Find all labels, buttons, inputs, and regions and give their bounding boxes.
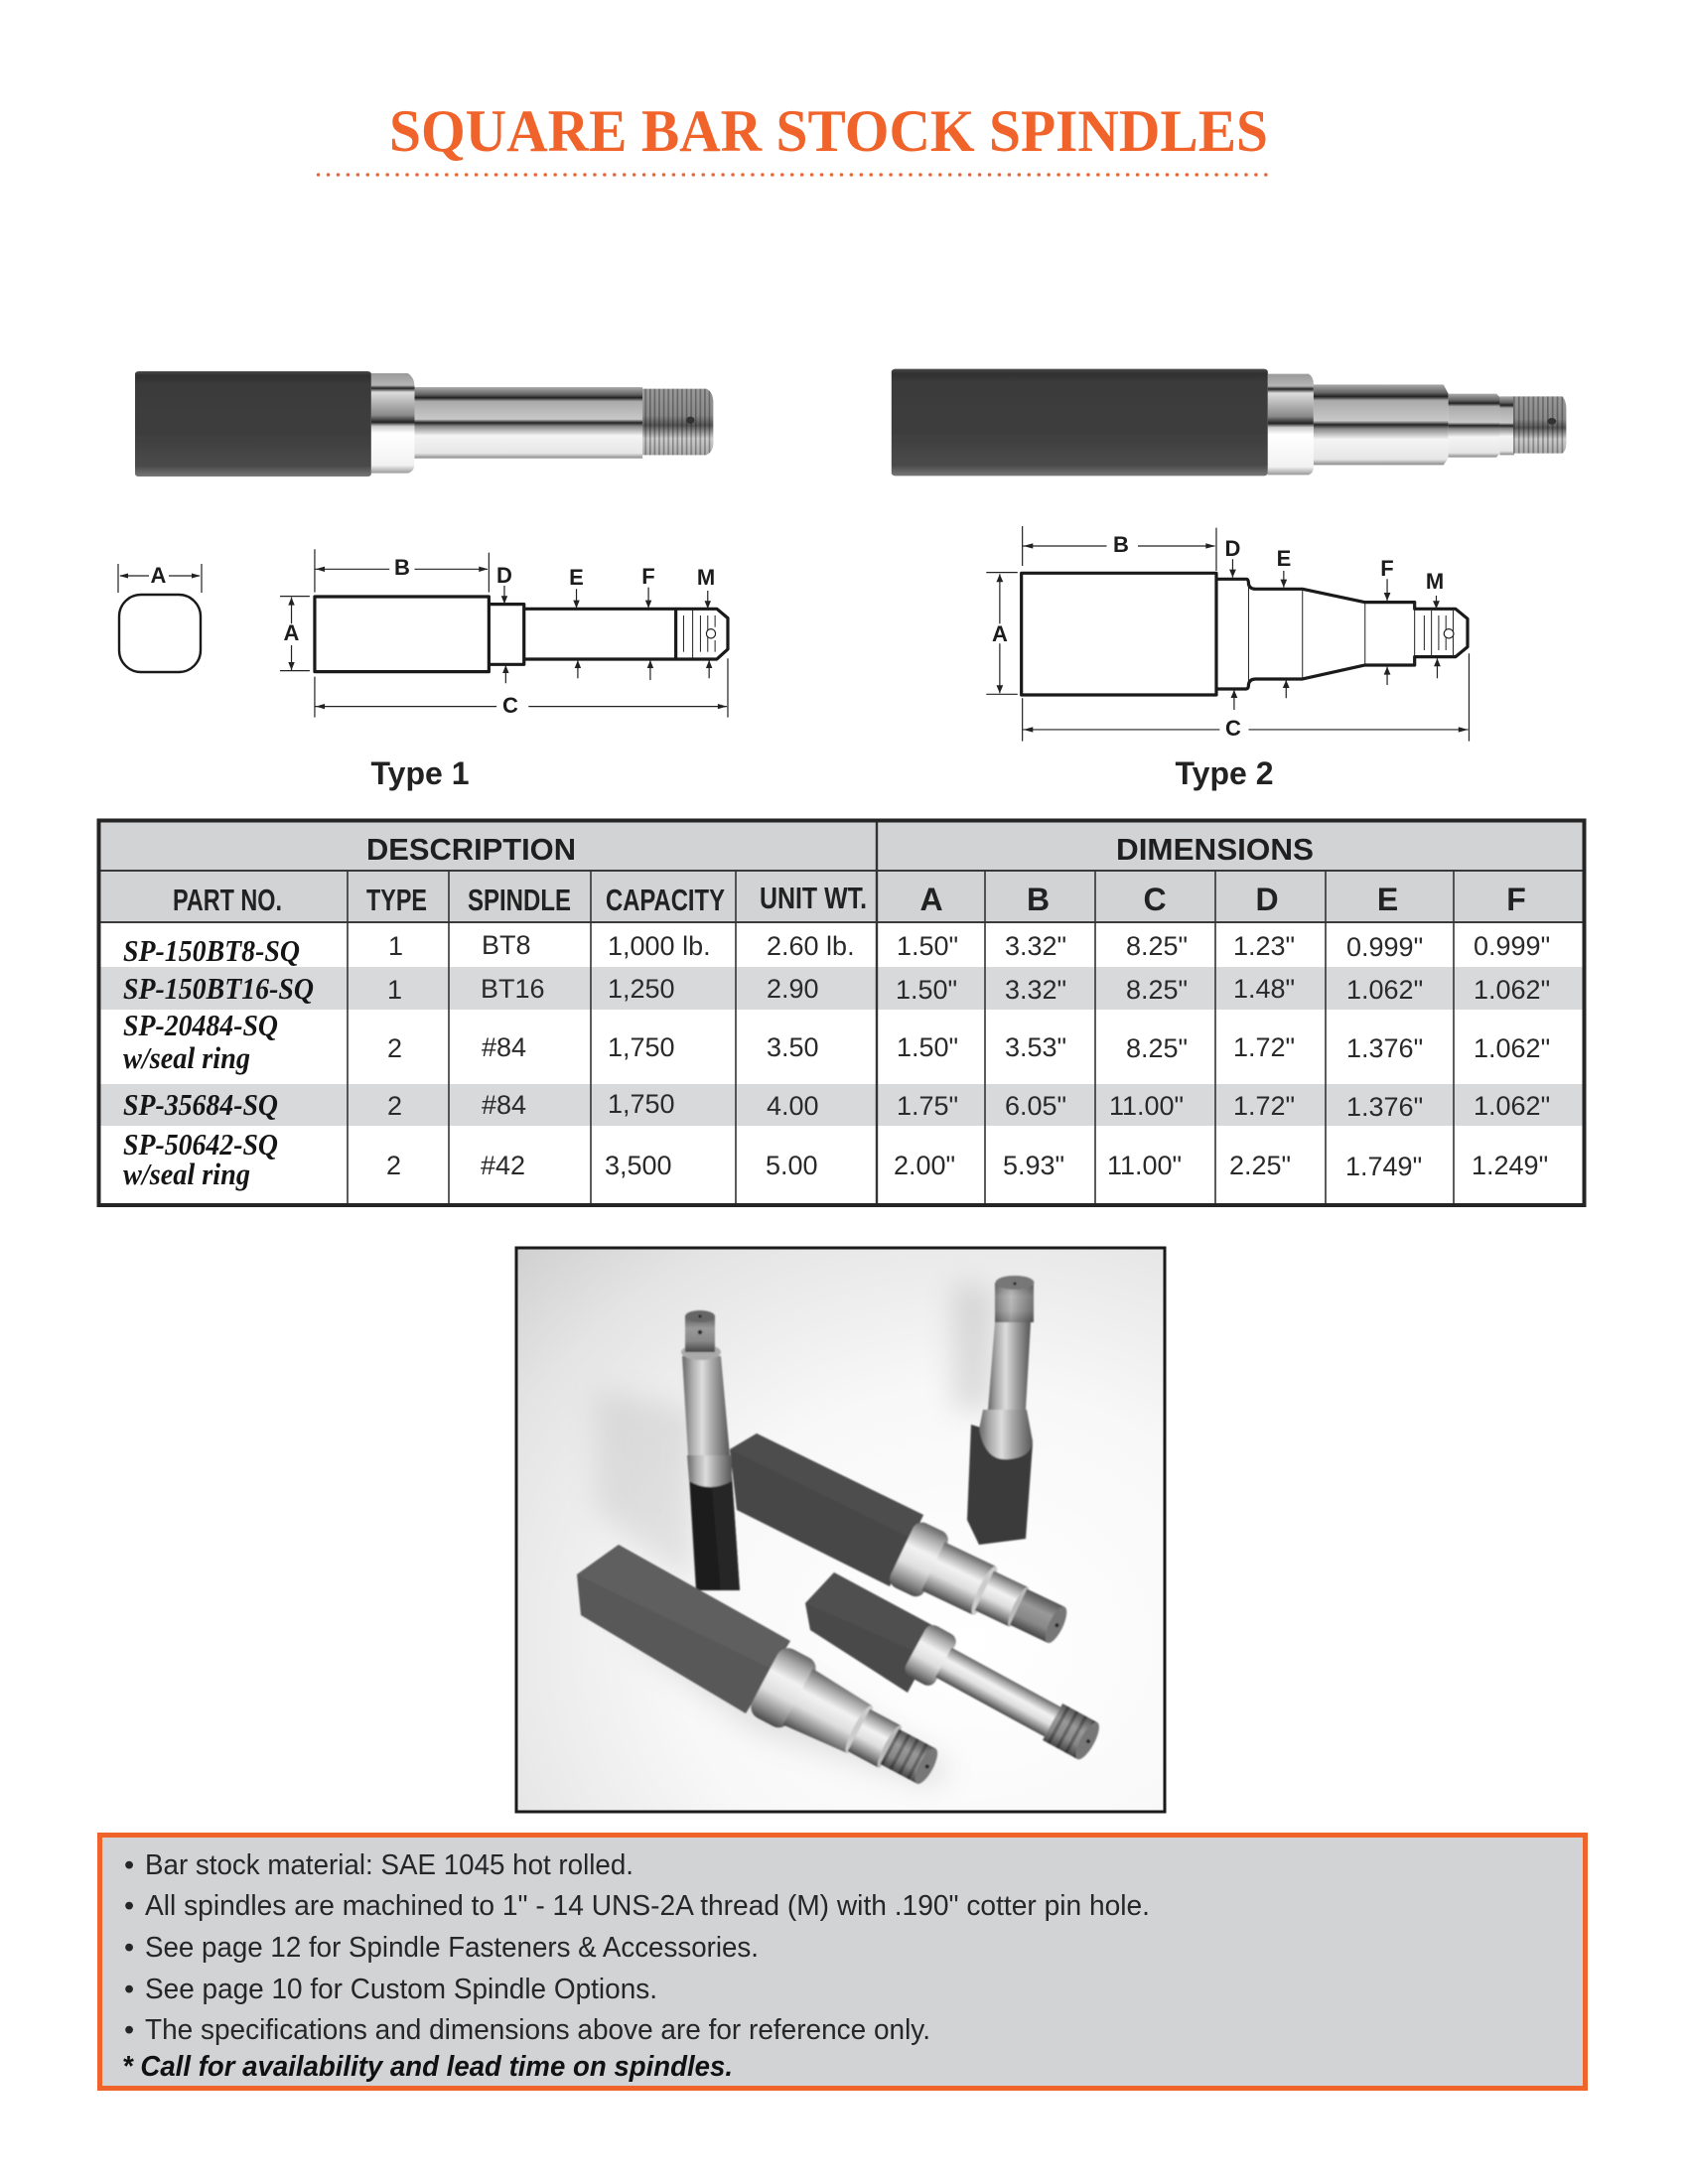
row: SP-35684-SQ: 1,750 xyxy=(608,1089,675,1119)
row: SP-150BT8-SQ: 0.999" xyxy=(1346,932,1423,962)
row: SP-150BT16-SQ: 1.50" xyxy=(896,975,957,1005)
row: SP-150BT8-SQ xyxy=(123,930,1550,968)
table column headers: A xyxy=(919,882,943,917)
diagram: type 2: M xyxy=(1426,569,1444,594)
table column headers: B xyxy=(1027,882,1050,917)
note: availability: * Call for availability and lead time on spindles. xyxy=(122,2051,733,2083)
row: SP-150BT16-SQ: 1.48" xyxy=(1233,974,1295,1004)
note: thread: • xyxy=(124,1890,134,1922)
diagram: type 2: C xyxy=(1225,716,1241,741)
row: SP-20484-SQ: #84 xyxy=(482,1032,526,1062)
row: SP-35684-SQ: 1.376" xyxy=(1346,1092,1423,1122)
title: SQUARE BAR STOCK SPINDLES xyxy=(389,98,1268,164)
spindle: lying front small xyxy=(805,1572,1107,1769)
row: SP-35684-SQ: SP-35684-SQ xyxy=(123,1087,278,1122)
photo: type 2 spindle xyxy=(892,369,1566,476)
row: SP-150BT8-SQ: BT8 xyxy=(482,930,531,960)
note: thread: All spindles are machined to 1" - 14 UNS-2A thread (M) with .190" cotter pin hole. xyxy=(145,1890,1150,1922)
table column headers: SPINDLE xyxy=(468,883,571,917)
caption: type 1: Type 1 xyxy=(371,755,469,791)
row: SP-150BT8-SQ: 8.25" xyxy=(1126,931,1188,961)
photo: type 1 spindle xyxy=(135,371,713,477)
table: spindle specifications xyxy=(99,820,1585,1205)
diagram: type 2: A xyxy=(992,621,1008,646)
table section headers xyxy=(366,832,1314,867)
row: SP-150BT16-SQ: BT16 xyxy=(481,974,545,1004)
table column headers: C xyxy=(1143,882,1167,917)
table column headers: E xyxy=(1377,882,1398,917)
row: SP-150BT16-SQ xyxy=(123,971,1550,1006)
table section headers: DIMENSIONS xyxy=(1116,832,1314,867)
row: SP-50642-SQ: w/seal ring xyxy=(123,1157,250,1191)
spindle: lying middle xyxy=(730,1433,1077,1660)
row: SP-20484-SQ: SP-20484-SQ xyxy=(123,1008,278,1042)
diagram: square end view: A xyxy=(151,563,167,588)
diagram: type 1: A xyxy=(284,620,300,645)
diagram: type 2: B xyxy=(1113,532,1129,557)
row: SP-150BT8-SQ: 1,000 lb. xyxy=(608,931,711,961)
row: SP-20484-SQ: w/seal ring xyxy=(123,1040,250,1075)
row: SP-20484-SQ: 8.25" xyxy=(1126,1033,1188,1063)
row: SP-50642-SQ: 2.25" xyxy=(1229,1151,1291,1180)
spindle: lying front left xyxy=(577,1545,951,1802)
row: SP-150BT16-SQ: 8.25" xyxy=(1126,975,1188,1005)
table column headers: CAPACITY xyxy=(606,883,725,917)
note: reference only: • xyxy=(124,2014,134,2046)
row: SP-20484-SQ xyxy=(123,1008,1550,1075)
row: SP-35684-SQ: 6.05" xyxy=(1005,1091,1066,1121)
row: SP-150BT8-SQ: 1.50" xyxy=(897,931,958,961)
row: SP-20484-SQ: 1.72" xyxy=(1233,1032,1295,1062)
diagram: type 1: D xyxy=(496,563,512,588)
row: SP-20484-SQ: 3.53" xyxy=(1005,1032,1066,1062)
row: SP-20484-SQ: 2 xyxy=(387,1033,402,1063)
row: SP-150BT16-SQ: SP-150BT16-SQ xyxy=(123,971,314,1006)
diagram: square end view xyxy=(118,563,202,672)
table column headers xyxy=(173,881,1526,917)
note: reference only: The specifications and dimensions above are for reference only. xyxy=(145,2014,930,2046)
table column headers: D xyxy=(1255,882,1279,917)
diagram: type 1: B xyxy=(394,555,410,580)
row: SP-150BT8-SQ: SP-150BT8-SQ xyxy=(123,933,300,968)
note: fasteners: • xyxy=(124,1932,134,1964)
row: SP-35684-SQ xyxy=(123,1087,1550,1122)
row: SP-20484-SQ: 1.50" xyxy=(897,1032,958,1062)
table column headers: UNIT WT. xyxy=(760,881,867,915)
table column headers: TYPE xyxy=(366,883,427,917)
row: SP-150BT16-SQ: 2.90 xyxy=(767,974,819,1004)
diagram: type 1 xyxy=(280,549,728,718)
diagram: type 1: F xyxy=(641,564,655,589)
row: SP-50642-SQ: 11.00" xyxy=(1107,1151,1182,1180)
note: bar stock material: • xyxy=(124,1849,134,1881)
photo: group of five spindles xyxy=(516,1248,1165,1812)
diagram: type 2: E xyxy=(1277,546,1291,571)
row: SP-150BT8-SQ: 1.23" xyxy=(1233,931,1295,961)
row: SP-35684-SQ: #84 xyxy=(482,1090,526,1120)
row: SP-50642-SQ: SP-50642-SQ xyxy=(123,1127,278,1161)
row: SP-50642-SQ: #42 xyxy=(481,1151,525,1180)
row: SP-150BT8-SQ: 2.60 lb. xyxy=(767,931,855,961)
table column headers: PART NO. xyxy=(173,883,282,917)
row: SP-35684-SQ: 1.72" xyxy=(1233,1091,1295,1121)
row: SP-150BT16-SQ: 1,250 xyxy=(608,974,675,1004)
row: SP-35684-SQ: 1.75" xyxy=(897,1091,958,1121)
diagram: type 2 xyxy=(986,526,1469,742)
diagram: type 2: F xyxy=(1380,556,1394,581)
caption: type 2: Type 2 xyxy=(1176,755,1273,791)
row: SP-20484-SQ: 1.376" xyxy=(1346,1033,1423,1063)
row: SP-50642-SQ xyxy=(123,1127,1548,1191)
diagram: type 1: E xyxy=(569,565,584,590)
row: SP-150BT16-SQ: 1 xyxy=(387,975,402,1005)
row: SP-20484-SQ: 3.50 xyxy=(767,1032,819,1062)
row: SP-50642-SQ: 1.749" xyxy=(1345,1152,1422,1181)
row: SP-150BT16-SQ: 3.32" xyxy=(1005,975,1066,1005)
row: SP-50642-SQ: 1.249" xyxy=(1472,1151,1548,1180)
diagram: type 1: C xyxy=(502,693,518,718)
notes panel xyxy=(99,1835,1585,2089)
row: SP-35684-SQ: 1.062" xyxy=(1474,1091,1550,1121)
row: SP-150BT16-SQ: 1.062" xyxy=(1346,975,1423,1005)
row: SP-50642-SQ: 5.93" xyxy=(1003,1151,1064,1180)
table section headers: DESCRIPTION xyxy=(366,832,576,867)
diagram: type 2: D xyxy=(1225,536,1240,561)
row: SP-35684-SQ: 2 xyxy=(387,1091,402,1121)
row: SP-20484-SQ: 1.062" xyxy=(1474,1033,1550,1063)
row: SP-20484-SQ: 1,750 xyxy=(608,1032,675,1062)
row: SP-35684-SQ: 4.00 xyxy=(767,1091,819,1121)
spindle: standing left xyxy=(681,1310,740,1590)
row: SP-150BT8-SQ: 1 xyxy=(388,931,403,961)
row: SP-50642-SQ: 3,500 xyxy=(605,1151,672,1180)
note: custom options: • xyxy=(124,1974,134,2005)
row: SP-150BT8-SQ: 3.32" xyxy=(1005,931,1066,961)
spindle: standing right xyxy=(967,1276,1035,1545)
row: SP-150BT8-SQ: 0.999" xyxy=(1474,931,1550,961)
diagram: type 1: M xyxy=(697,565,715,590)
note: fasteners: See page 12 for Spindle Fasteners & Accessories. xyxy=(145,1932,759,1964)
row: SP-50642-SQ: 5.00 xyxy=(766,1151,818,1180)
row: SP-50642-SQ: 2.00" xyxy=(894,1151,955,1180)
note: custom options: See page 10 for Custom Spindle Options. xyxy=(145,1974,657,2005)
row: SP-150BT16-SQ: 1.062" xyxy=(1474,975,1550,1005)
note: bar stock material: Bar stock material: SAE 1045 hot rolled. xyxy=(145,1849,633,1881)
table column headers: F xyxy=(1506,882,1526,917)
row: SP-35684-SQ: 11.00" xyxy=(1109,1091,1184,1121)
row: SP-50642-SQ: 2 xyxy=(386,1151,401,1180)
